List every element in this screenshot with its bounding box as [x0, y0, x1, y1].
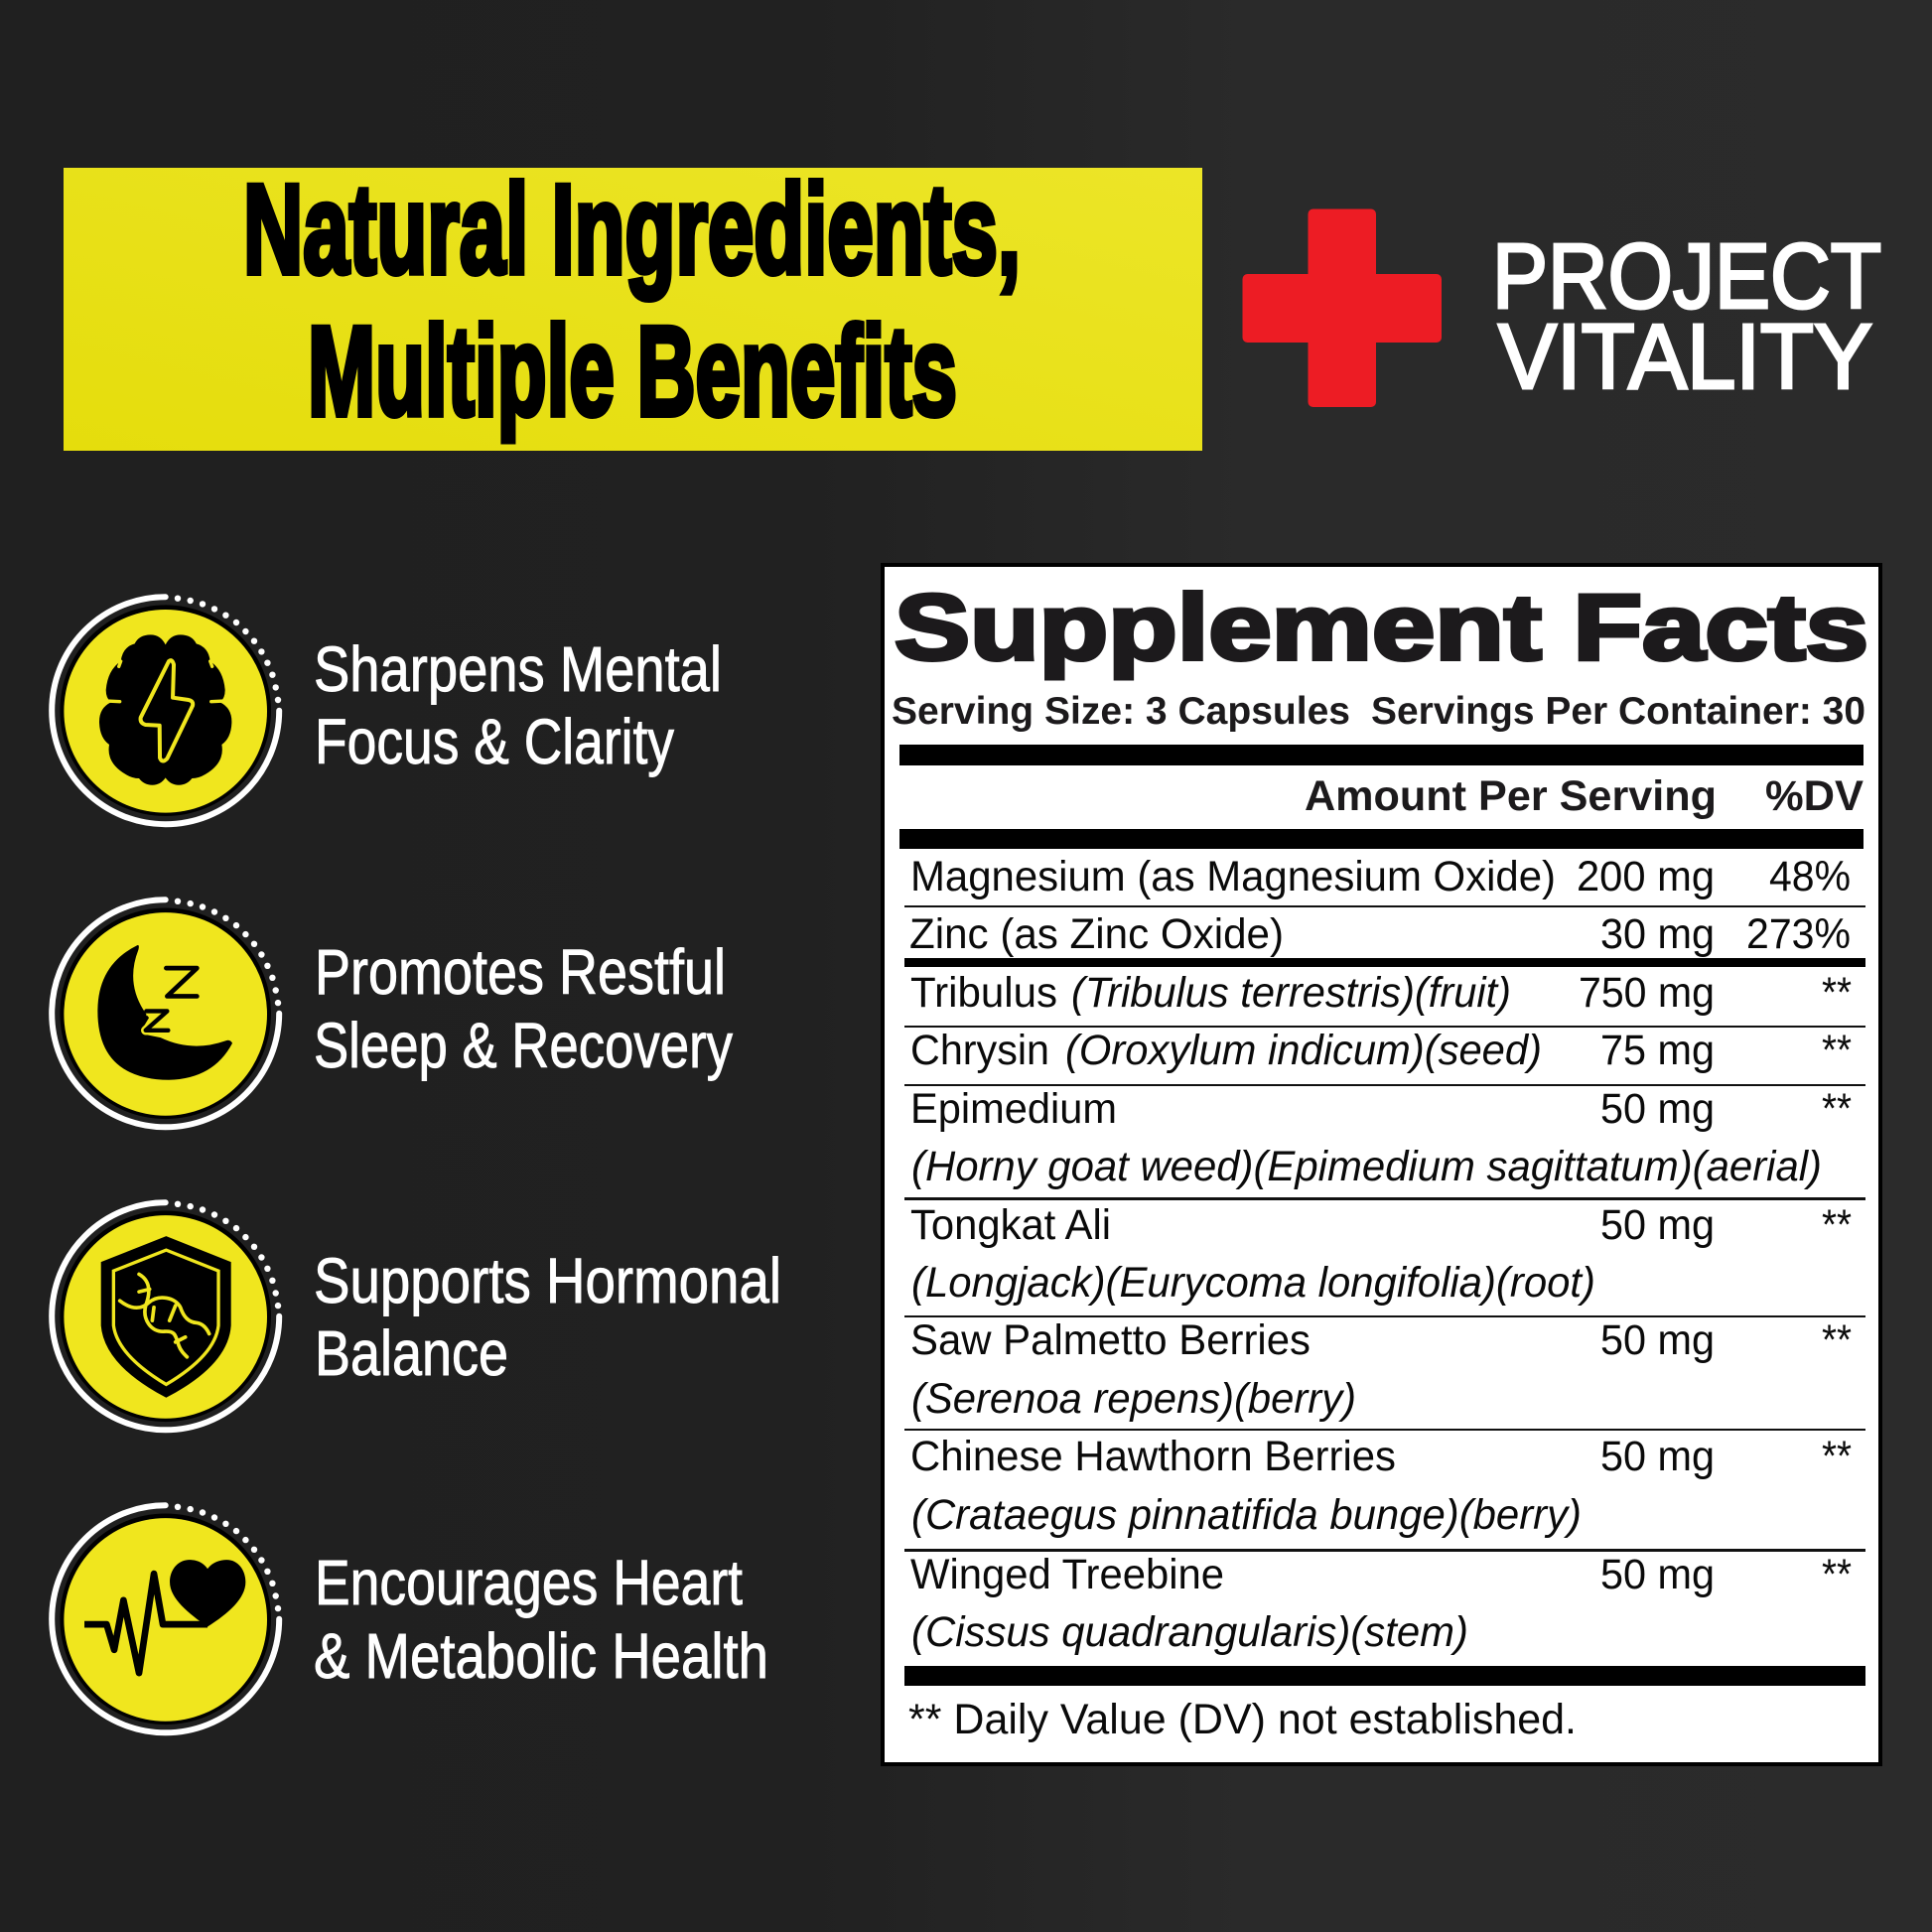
row: Tribulus: (Tribulus terrestris)(fruit) [1071, 969, 1511, 1017]
footnote: ** Daily Value (DV) not established. [908, 1696, 1577, 1743]
benefit text: Sharpens Mental [314, 633, 722, 705]
icon: crescent moon with Z letters [52, 898, 281, 1127]
row: Tribulus [910, 969, 1852, 1017]
row: Winged Treebine: Winged Treebine [910, 1551, 1224, 1598]
icon: shield with DNA helix [52, 1201, 281, 1430]
title line 2: Multiple Benefits [308, 301, 957, 443]
row: Chinese Hawthorn Berries: 50 mg [1600, 1433, 1715, 1480]
row: Epimedium [910, 1085, 1852, 1190]
row: Saw Palmetto Berries: ** [1822, 1316, 1852, 1364]
column headers: %DV [1765, 772, 1863, 820]
row: Epimedium: (Horny goat weed)(Epimedium sagittatum)(aerial) [911, 1143, 1822, 1190]
row: Zinc [909, 910, 1851, 958]
icon: red cross [1243, 208, 1442, 407]
benefit text: & Metabolic Health [314, 1620, 768, 1692]
title line 1: Natural Ingredients, [243, 159, 1021, 301]
row: Chinese Hawthorn Berries: Chinese Hawthorn Berries [910, 1433, 1396, 1480]
row: Saw Palmetto Berries: Saw Palmetto Berries [910, 1316, 1311, 1364]
row: Magnesium: 48% [1769, 853, 1851, 900]
benefit text: Encourages Heart [315, 1547, 743, 1618]
row: Epimedium: Epimedium [910, 1085, 1117, 1133]
serving info [892, 690, 1865, 733]
benefit: mental focus [52, 596, 722, 824]
benefit text: Balance [315, 1317, 508, 1389]
benefit: hormonal balance [52, 1201, 781, 1430]
row: Chrysin: ** [1822, 1027, 1852, 1074]
row: Winged Treebine: 50 mg [1600, 1551, 1715, 1598]
row: Saw Palmetto Berries: (Serenoa repens)(berry) [911, 1375, 1356, 1423]
row: Winged Treebine: ** [1822, 1551, 1852, 1598]
benefit text: Supports Hormonal [314, 1245, 781, 1316]
row: Chrysin [910, 1027, 1852, 1074]
benefit text [314, 1547, 768, 1692]
icon: brain with lightning bolt [52, 596, 281, 824]
row: Chrysin: 75 mg [1600, 1027, 1715, 1074]
benefit: heart and metabolic health [52, 1504, 768, 1732]
row: Magnesium: 200 mg [1577, 853, 1715, 900]
serving info: Servings Per Container: 30 [1371, 690, 1865, 733]
row: Tongkat Ali: (Longjack)(Eurycoma longifolia)(root) [911, 1259, 1595, 1307]
row: Winged Treebine: (Cissus quadrangularis)(stem) [911, 1608, 1468, 1656]
row: Tribulus: Tribulus [910, 969, 1057, 1017]
benefit text [314, 633, 722, 777]
row: Epimedium: ** [1822, 1085, 1852, 1133]
row: Magnesium: Magnesium (as Magnesium Oxide) [910, 853, 1556, 900]
row: Winged Treebine [910, 1551, 1852, 1656]
row: Tongkat Ali [910, 1201, 1852, 1307]
benefit text [314, 936, 733, 1081]
serving info: Serving Size: 3 Capsules [892, 690, 1350, 733]
heading: Supplement Facts: Supplement Facts [895, 575, 1868, 679]
row: Saw Palmetto Berries: 50 mg [1600, 1316, 1715, 1364]
brand name line 2: VITALITY [1498, 305, 1872, 408]
row: Tongkat Ali: 50 mg [1600, 1201, 1715, 1249]
row: Zinc: 273% [1746, 910, 1851, 958]
logo: Project Vitality [1243, 208, 1881, 408]
row: Chinese Hawthorn Berries [910, 1433, 1852, 1539]
icon: heart with pulse line [52, 1504, 281, 1732]
row: Tribulus: ** [1822, 969, 1852, 1017]
row: Tongkat Ali: Tongkat Ali [910, 1201, 1111, 1249]
benefit text: Focus & Clarity [315, 706, 674, 777]
brand name line 1: PROJECT [1492, 224, 1881, 328]
benefit: restful sleep [52, 898, 733, 1127]
benefit text: Sleep & Recovery [314, 1010, 733, 1081]
panel: supplement facts [883, 565, 1880, 1764]
row: Saw Palmetto Berries [910, 1316, 1852, 1423]
row: Chinese Hawthorn Berries: ** [1822, 1433, 1852, 1480]
row: Chrysin: (Oroxylum indicum)(seed) [1065, 1027, 1542, 1074]
row: Zinc: 30 mg [1600, 910, 1715, 958]
row: Chrysin: Chrysin [910, 1027, 1049, 1074]
benefit text: Promotes Restful [315, 936, 726, 1008]
row: Chinese Hawthorn Berries: (Crataegus pinnatifida bunge)(berry) [911, 1491, 1582, 1539]
title banner [64, 159, 1202, 451]
benefit text [314, 1245, 781, 1389]
row: Tribulus: 750 mg [1579, 969, 1715, 1017]
column headers: Amount Per Serving [1305, 772, 1717, 820]
row: Tongkat Ali: ** [1822, 1201, 1852, 1249]
row: Epimedium: 50 mg [1600, 1085, 1715, 1133]
row: Zinc: Zinc (as Zinc Oxide) [909, 910, 1284, 958]
